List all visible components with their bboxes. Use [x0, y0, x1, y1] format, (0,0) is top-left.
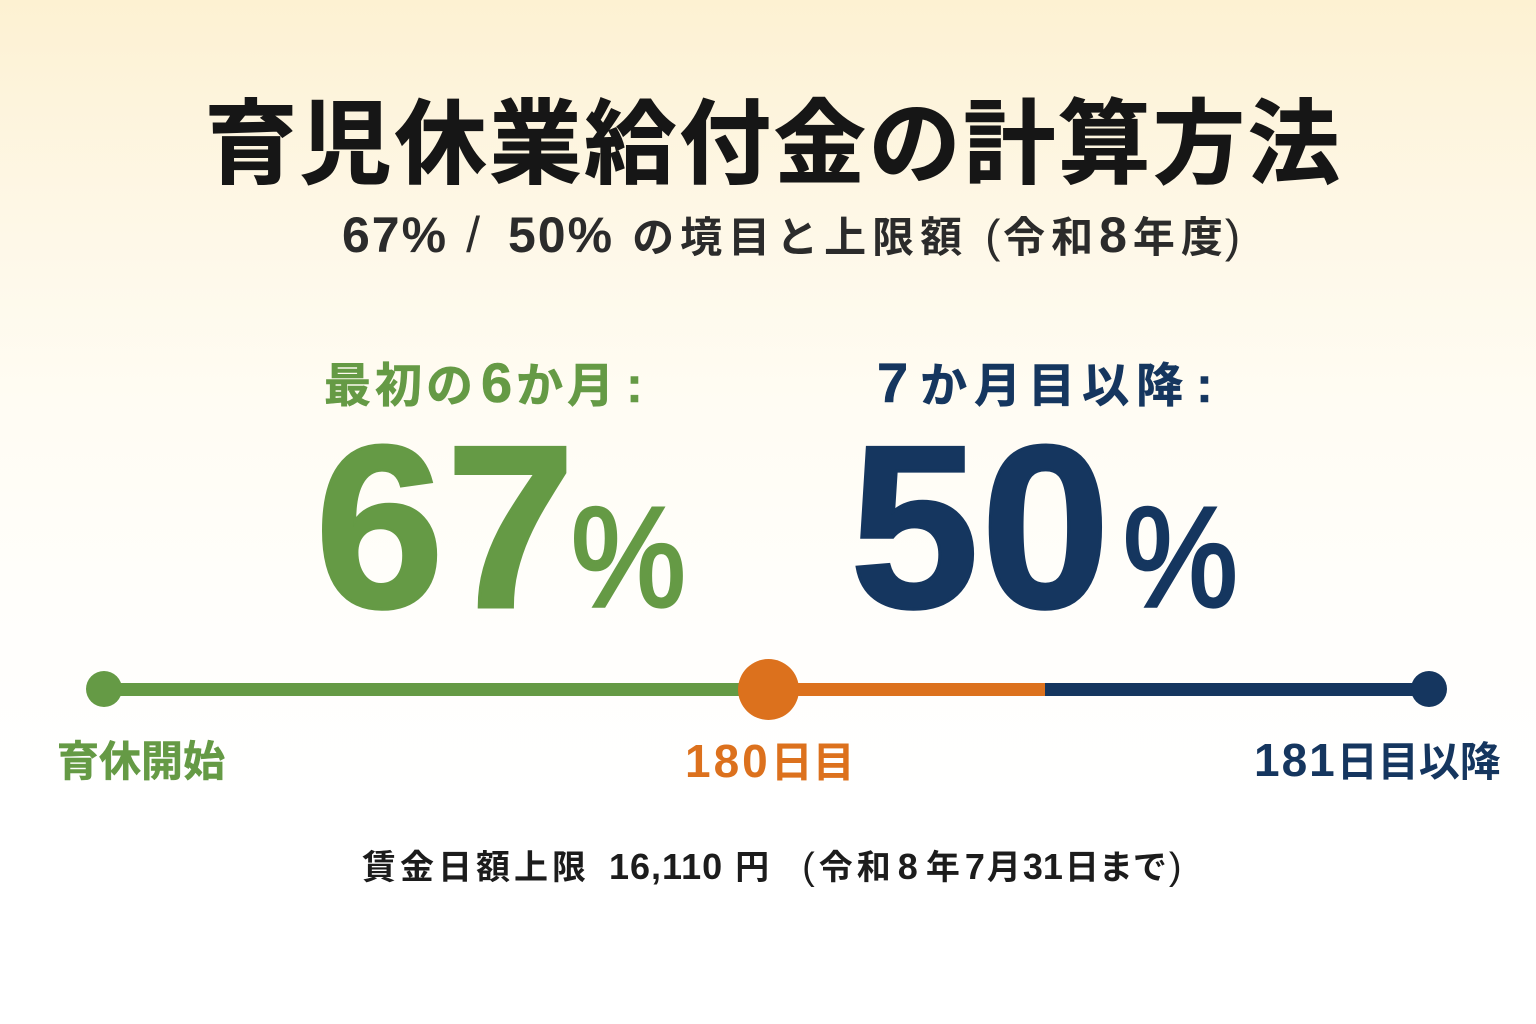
- subtitle: (: [985, 210, 1000, 262]
- percent sign: %: [571, 478, 686, 637]
- green segment: [104, 683, 768, 696]
- subtitle: 67% / 50% の境目と上限額 令和8年度): [342, 207, 1240, 263]
- label: day 180: 180日目: [685, 735, 855, 787]
- label: day 181 onward: 181日目以降: [1254, 734, 1501, 786]
- label: leave start: 育休開始: [57, 738, 225, 785]
- timeline: [86, 659, 1447, 720]
- 180 day marker: [738, 659, 799, 720]
- percent sign: %: [1123, 478, 1238, 637]
- percentage: 67%: [315, 398, 686, 657]
- heading: seventh month onward: 7 か月目以降:: [877, 351, 1220, 414]
- digits 50: 50: [850, 398, 1112, 657]
- end marker: [1411, 671, 1447, 707]
- start marker: [86, 671, 122, 707]
- daily wage cap note: 賃金日額上限 16,110 円 (令和8年7月31日まで): [362, 846, 1182, 888]
- digits 67: 67: [315, 398, 577, 657]
- orange segment: [768, 683, 1045, 696]
- heading: first six months: 最初の6か月:: [324, 351, 647, 414]
- navy segment: [1045, 683, 1429, 696]
- percentage: 50%: [850, 398, 1238, 657]
- title: 育児休業給付金の計算方法: [205, 94, 1343, 196]
